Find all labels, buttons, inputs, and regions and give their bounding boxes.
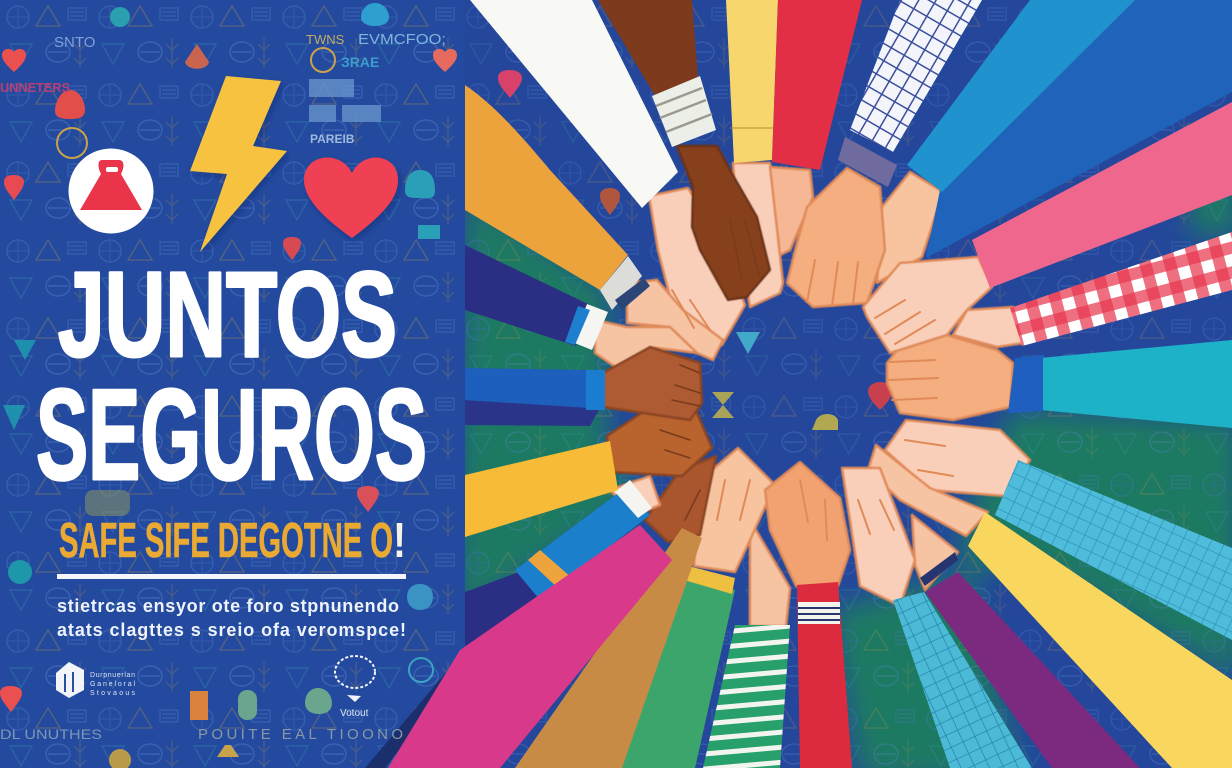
icon: yellow badge bbox=[85, 490, 130, 516]
label: POUITE: POUITE EAL TIOONO bbox=[198, 726, 403, 743]
sleeve: purple bbox=[925, 572, 1140, 768]
wristband: white stripes bbox=[652, 76, 716, 147]
hand: pale bottom right bbox=[842, 468, 915, 606]
dark finger lines bbox=[660, 220, 759, 520]
background icons and faded labels bbox=[0, 3, 892, 768]
icon: teal circle top bbox=[110, 7, 130, 27]
sleeve: pink bbox=[972, 102, 1232, 288]
hand: narrow bottom bbox=[750, 520, 790, 626]
label: UNNETERS: UNNETERS bbox=[0, 80, 70, 95]
icon: teal shield center bbox=[736, 332, 760, 354]
sleeve: checked white bbox=[850, 0, 982, 152]
sleeve: yellow left bbox=[465, 441, 618, 537]
sleeve: magenta bbox=[388, 525, 672, 768]
icon: pin near tagline bbox=[357, 486, 379, 512]
hand: wrist left bbox=[610, 476, 660, 515]
icon: pin left bbox=[4, 175, 24, 200]
icon: coral cone bbox=[185, 44, 209, 69]
sleeve: green bbox=[600, 576, 735, 768]
hand: dark brown top bbox=[677, 146, 770, 300]
hand: pale left lower bbox=[627, 280, 723, 360]
icon: pin lower left bbox=[0, 686, 22, 712]
sleeve: red bottom bbox=[797, 582, 852, 768]
sleeve seams bbox=[730, 127, 774, 129]
icon: olive badge center bbox=[812, 414, 838, 430]
icon: small heart top left bbox=[2, 49, 26, 72]
cuff: grey bbox=[600, 256, 642, 310]
tagline bbox=[59, 514, 406, 568]
cuff: striped bbox=[798, 602, 840, 624]
bracelet bbox=[615, 278, 650, 310]
hand: wrist red check bbox=[953, 307, 1030, 347]
cuff: blue left bbox=[586, 370, 605, 410]
hand: brown bottom-left bbox=[645, 456, 716, 542]
sleeve: blue lower bbox=[515, 488, 650, 600]
icon: teal ring lower right bbox=[409, 658, 433, 682]
icon: pink pin right panel bbox=[498, 70, 522, 98]
cuff: blue bbox=[1008, 355, 1043, 413]
finger lines bbox=[672, 260, 953, 540]
hand: wrist top bbox=[770, 167, 813, 255]
hand: brown lower left bbox=[607, 412, 712, 476]
icon: small heart top right bbox=[433, 49, 457, 72]
icon: gold bag right bbox=[311, 48, 335, 72]
sleeve: navy left bbox=[465, 245, 590, 346]
icon: brown pin top bbox=[600, 188, 620, 215]
sleeve: orange bbox=[465, 85, 628, 290]
logo caption: Votout bbox=[340, 708, 369, 719]
icon: green hat bbox=[305, 688, 332, 714]
icon: blue badge top bbox=[361, 3, 389, 26]
icon: red pin under heart bbox=[283, 237, 301, 260]
left panel bbox=[0, 0, 476, 768]
icon: green badge bbox=[238, 690, 257, 720]
icon: teal shield lower right bbox=[407, 584, 433, 610]
sleeve: red top bbox=[772, 0, 862, 170]
icon: lightning bolt bbox=[190, 76, 287, 252]
hand: pale bottom left bbox=[694, 448, 775, 572]
icon: teal badge bbox=[405, 170, 440, 239]
sleeve: yellow bottom right bbox=[968, 512, 1232, 768]
icon: gold mark bottom bbox=[217, 745, 239, 757]
sleeve: yellow top bbox=[726, 0, 778, 163]
icon: orange square bbox=[190, 691, 208, 720]
body text bbox=[57, 596, 406, 640]
hand: brown left bbox=[603, 347, 702, 420]
sleeve: light blue check right bbox=[995, 460, 1232, 640]
label: blocks bbox=[309, 79, 381, 122]
icon: teal shield left bbox=[3, 340, 36, 430]
sleeve: green stripes bbox=[703, 625, 790, 768]
body text: stietrcas ensyor ote foro stpnunendo bbox=[57, 596, 399, 616]
hand: pale left wrist bbox=[595, 320, 697, 370]
sleeve: tan bbox=[515, 528, 702, 768]
logo right bbox=[335, 656, 375, 719]
background: green bands behind arms bbox=[455, 180, 1232, 768]
hand: tan bottom bbox=[765, 462, 850, 586]
tagline exclamation: ! bbox=[393, 514, 406, 568]
cuff: orange bbox=[528, 550, 572, 590]
hand: wrist lower right bbox=[868, 445, 988, 536]
hand: wrist purple bbox=[912, 515, 958, 590]
icon: kettlebell in white circle bbox=[68, 148, 154, 234]
icon: heart bbox=[304, 157, 398, 238]
hand: pale right bbox=[863, 257, 992, 353]
hand: tan top bbox=[787, 168, 885, 307]
hand: pale lower right bbox=[885, 420, 1030, 496]
title line: JUNTOS: JUNTOS bbox=[58, 246, 397, 382]
hand: pale top-left bbox=[649, 188, 745, 345]
sleeve: navy band left bbox=[465, 400, 600, 426]
icon: red blob bbox=[55, 90, 85, 119]
group of hands in a circle bbox=[388, 0, 1232, 768]
hands layer bbox=[595, 146, 1030, 626]
sleeve: blue left bbox=[465, 368, 590, 408]
label: SNTO: SNTO bbox=[54, 34, 95, 51]
panel edge shadow bbox=[365, 650, 476, 768]
cuff: white bbox=[615, 480, 652, 518]
label: EVMCFOO: EVMCFOO; bbox=[358, 31, 446, 48]
sleeve: white bbox=[470, 0, 678, 208]
tagline: SAFE SIFE DEGOTNE O bbox=[59, 514, 393, 568]
sleeve: teal blue bbox=[907, 0, 1135, 192]
sleeve: dark brown bbox=[598, 0, 698, 96]
sleeve: red check bbox=[1010, 232, 1232, 346]
icon: teal pin lower bbox=[8, 560, 32, 584]
sleeve: teal bbox=[1040, 340, 1232, 428]
title bbox=[36, 246, 427, 507]
divider rule bbox=[57, 574, 406, 579]
cuff: green sleeve yellow bbox=[684, 566, 735, 594]
icon: gold circle bottom bbox=[109, 749, 131, 768]
cuff: grey purple bbox=[838, 137, 897, 187]
body text line 2: atats clagttes s sreio ofa veromspce! bbox=[57, 620, 406, 640]
logo caption: Durpnuerlan bbox=[90, 672, 135, 679]
hand: wrist right top bbox=[877, 172, 943, 283]
label: PAREIB: PAREIB bbox=[310, 132, 355, 146]
sleeves layer bbox=[388, 0, 1232, 768]
hand: tan right bbox=[887, 335, 1013, 420]
sleeve: light check bottom bbox=[893, 592, 1032, 768]
label: UNUTHES: DL UNUTHES bbox=[0, 726, 102, 742]
logo left: Stovaous bbox=[90, 690, 136, 697]
sleeve: navy lower bbox=[465, 568, 560, 665]
icon: gold bag left bbox=[57, 128, 87, 158]
icon: red pin center bbox=[868, 382, 892, 410]
hand: narrow pale top bbox=[733, 163, 783, 307]
cuff: white and blue bbox=[565, 304, 608, 350]
title line: SEGUROS: SEGUROS bbox=[36, 363, 427, 507]
logo left bbox=[56, 662, 136, 698]
sleeve: royal blue bbox=[926, 0, 1232, 258]
cuff: purple sleeve stripes bbox=[920, 552, 958, 586]
logo left: Ganeloral bbox=[90, 681, 135, 688]
label: BAE: ЗRAE bbox=[341, 54, 379, 70]
label: TWNS: TWNS bbox=[306, 32, 345, 47]
icon: olive mark center bbox=[712, 392, 734, 418]
